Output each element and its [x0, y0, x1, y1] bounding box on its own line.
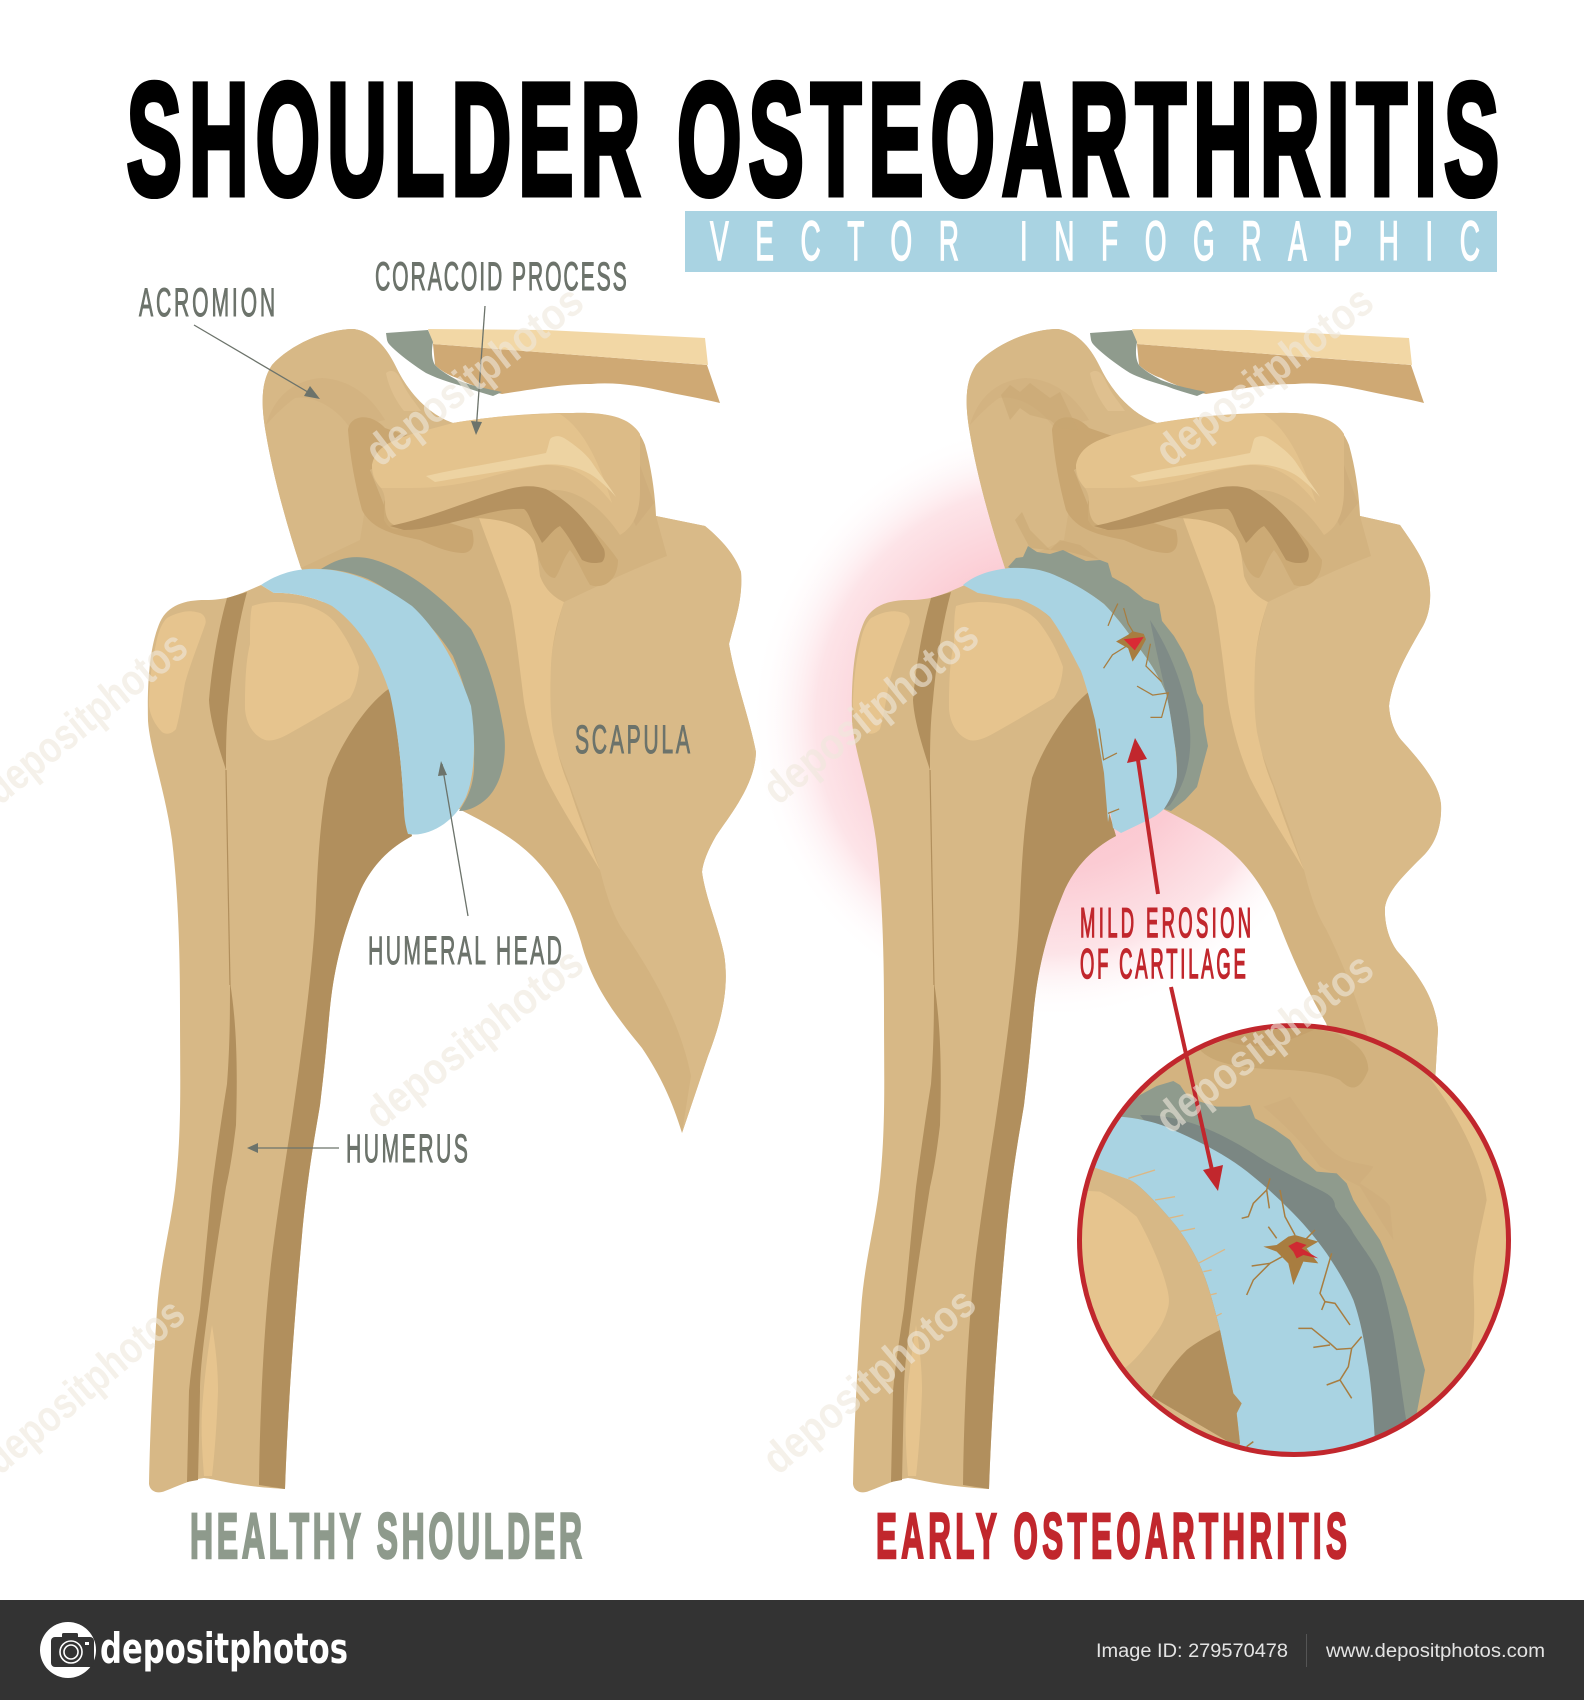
inflammation glow [750, 420, 1350, 1020]
label: humerus [247, 1126, 468, 1171]
label: acromion: ACROMION [139, 280, 275, 325]
watermarks: depositphotos [1146, 943, 1383, 1143]
cracks [1242, 1178, 1362, 1447]
label: coracoid process [375, 254, 627, 435]
watermarks [0, 276, 1383, 1484]
watermarks: depositphotos [356, 938, 593, 1138]
callout: mild erosion of cartilage: MILD EROSION [1080, 899, 1251, 946]
callout: mild erosion of cartilage: OF CARTILAGE [1080, 940, 1246, 987]
logo wordmark: depositphotos [100, 1624, 348, 1673]
arrow: to magnified view [1171, 987, 1223, 1191]
crack star [1263, 1235, 1318, 1285]
eroded grey cartilage [1008, 546, 1208, 811]
magnified circle [1077, 1023, 1511, 1457]
subtitle banner: VECTOR INFOGRAPHIC [710, 211, 1480, 273]
cartilage [1094, 1116, 1375, 1452]
scapula blade [546, 516, 756, 1133]
footer bar [0, 1600, 1584, 1700]
scapula details [967, 329, 1358, 870]
eroded blue cartilage [963, 568, 1177, 833]
humeral head cartilage [261, 569, 474, 835]
outer grey layer [1122, 1081, 1425, 1420]
inner dark grey layer [1140, 1115, 1407, 1467]
humerus [148, 585, 412, 1492]
circle border [1080, 1026, 1508, 1454]
clavicle [1090, 329, 1424, 403]
image id: Image ID: 279570478 [1096, 1641, 1288, 1662]
scapula details [263, 329, 654, 870]
watermarks: depositphotos [753, 611, 988, 814]
inner grey stripe [1150, 620, 1190, 809]
head bone [1094, 1168, 1242, 1442]
label: humerus: HUMERUS [346, 1126, 468, 1171]
label: scapula: SCAPULA [575, 717, 690, 762]
heading: healthy shoulder: HEALTHY SHOULDER [190, 1500, 582, 1572]
label: coracoid process: CORACOID PROCESS [375, 254, 627, 299]
icon: camera logo [40, 1622, 96, 1678]
scapula body with wavy edge [967, 329, 1441, 1100]
arrow: to cartilage [1127, 738, 1158, 894]
grey glenoid cartilage [319, 557, 505, 811]
label: humeral head: HUMERAL HEAD [368, 928, 562, 973]
watermarks: depositphotos [1146, 276, 1383, 476]
callout: mild erosion of cartilage [1080, 738, 1251, 1191]
title: SHOULDER OSTEOARTHRITIS [126, 51, 1499, 230]
panel: healthy shoulder [148, 329, 756, 1492]
humerus [852, 585, 1116, 1492]
label: acromion [139, 280, 320, 399]
watermarks: depositphotos [356, 276, 593, 476]
label: humeral head [368, 761, 562, 973]
heading: early osteoarthritis: EARLY OSTEOARTHRITIS [876, 1500, 1347, 1572]
watermarks: depositphotos [753, 1278, 985, 1484]
scapula body [263, 329, 756, 1133]
panel: early osteoarthritis shoulder [852, 329, 1441, 1492]
clavicle [386, 329, 720, 403]
bone texture [1001, 383, 1100, 560]
website: www.depositphotos.com [1325, 1641, 1545, 1662]
cracks in cartilage [1099, 604, 1168, 813]
